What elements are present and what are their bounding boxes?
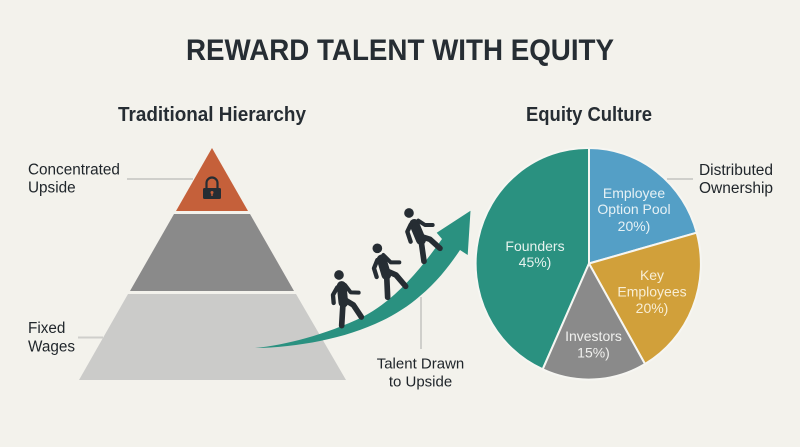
slice: founders: Founders (505, 238, 565, 254)
callout: distributed ownership: Distributed (699, 162, 773, 179)
heading: traditional hierarchy: Traditional Hierarchy (118, 104, 307, 126)
figure: middle climber (372, 243, 406, 297)
callout: fixed wages: Wages (28, 338, 75, 356)
pyramid top tier (176, 148, 248, 211)
slice: investors (543, 264, 645, 380)
callout: distributed ownership (667, 162, 773, 197)
figures climbing the arrow (333, 208, 440, 326)
icon: padlock (203, 178, 221, 199)
arrow: talent drawn to upside (255, 211, 470, 348)
callout: talent drawn to upside: Talent Drawn (377, 356, 464, 372)
slice: founders (476, 148, 589, 369)
pie chart: equity culture (476, 148, 701, 380)
slice: employee option pool: Option Pool (597, 201, 671, 217)
slice: employee option pool: 20%) (618, 218, 650, 234)
slice: key employees (589, 233, 701, 364)
callout: concentrated upside: Concentrated (28, 162, 120, 178)
callout: fixed wages (28, 320, 103, 356)
pyramid bottom tier (79, 294, 346, 380)
callout: talent drawn to upside (377, 297, 464, 390)
slice: key employees: Key (640, 267, 664, 283)
figure: upper climber (404, 208, 440, 261)
heading: equity culture: Equity Culture (526, 104, 652, 126)
figure: lower climber (333, 270, 361, 326)
callout: concentrated upside (28, 162, 193, 196)
slice: investors: 15%) (577, 344, 610, 360)
pyramid: traditional hierarchy (79, 148, 346, 380)
slice: investors: Investors (565, 328, 622, 344)
callout: concentrated upside: Upside (28, 180, 76, 196)
slice: employee option pool (589, 148, 697, 264)
callout: fixed wages: Fixed (28, 320, 65, 337)
callout: distributed ownership: Ownership (699, 180, 773, 197)
callout: talent drawn to upside: to Upside (389, 374, 452, 390)
slice: key employees: Employees (617, 284, 687, 300)
slice: founders: 45%) (519, 254, 551, 270)
slice: employee option pool: Employee (603, 185, 665, 201)
slice: key employees: 20%) (636, 300, 668, 316)
title: REWARD TALENT WITH EQUITY (186, 34, 614, 67)
pyramid middle tier (130, 214, 294, 291)
